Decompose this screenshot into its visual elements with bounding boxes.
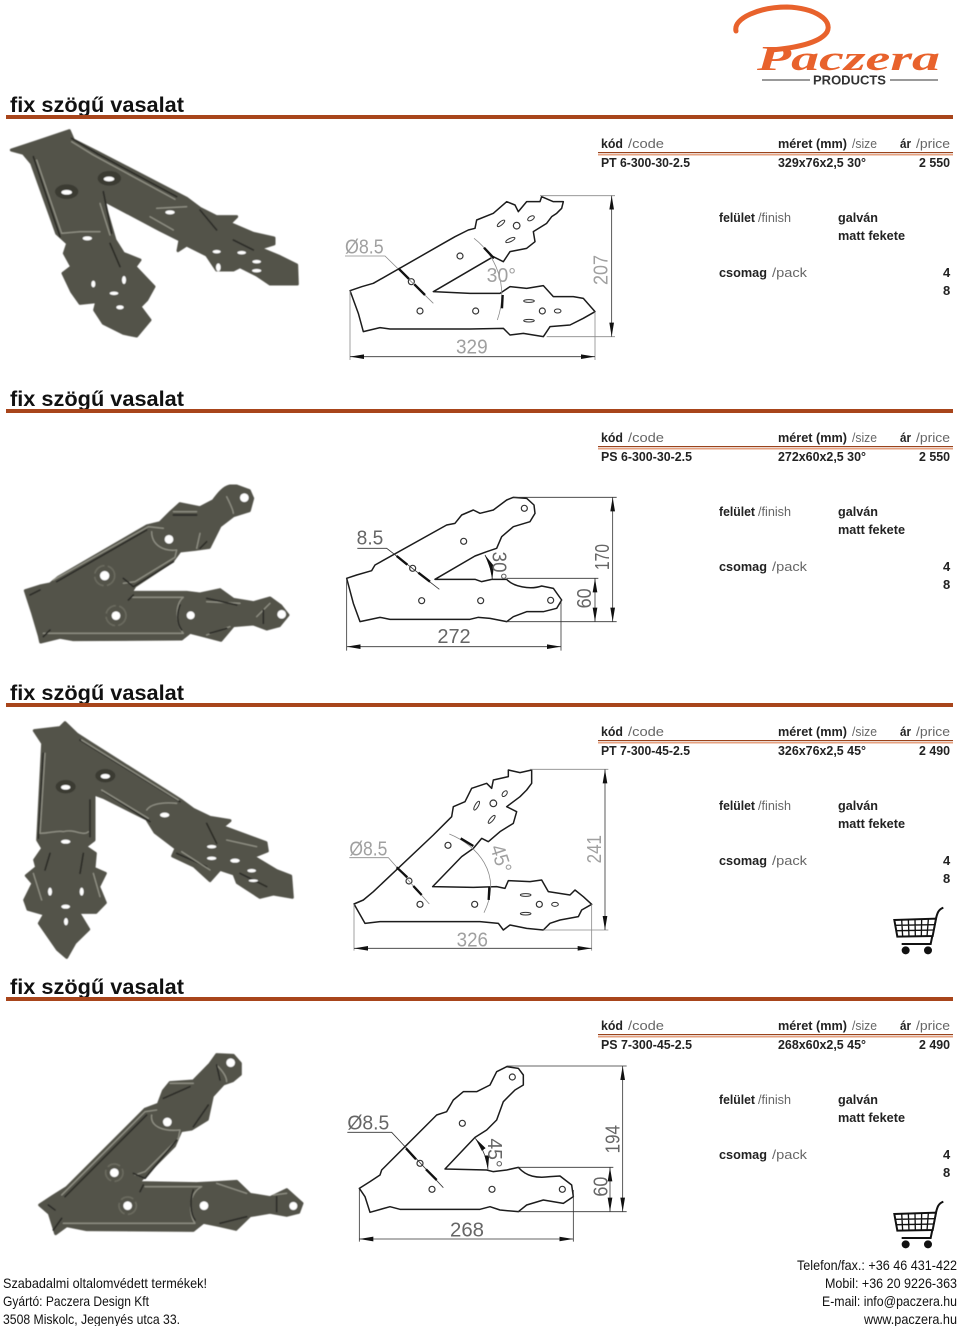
spec table row <box>601 155 950 170</box>
technical drawing: 272 <box>437 625 471 648</box>
finish and pack: felület <box>719 1092 756 1107</box>
spec table header: méret (mm) <box>778 1018 847 1033</box>
technical drawing: 45° <box>483 1138 506 1168</box>
finish and pack <box>719 210 951 298</box>
spec table header: kód <box>601 136 623 151</box>
spec table header: méret (mm) <box>778 724 847 739</box>
finish and pack: /finish <box>758 798 791 813</box>
spec table header <box>598 430 953 449</box>
finish and pack: felület <box>719 210 756 225</box>
spec table header <box>598 136 953 155</box>
product photo <box>25 486 288 642</box>
spec table row: 2 550 <box>919 155 950 170</box>
icon: shopping cart <box>894 908 943 954</box>
spec table header: /size <box>852 430 877 445</box>
spec table header: ár <box>900 136 911 151</box>
footer: left address: Gyártó: Paczera Design Kft <box>3 1293 149 1309</box>
spec table row <box>601 743 950 758</box>
spec table header: /price <box>916 430 950 445</box>
technical drawing <box>345 196 615 360</box>
panel: PT 7-300-45-2.5 <box>6 682 953 957</box>
spec table row: PS 7-300-45-2.5 <box>601 1037 692 1052</box>
spec table header <box>598 1018 953 1037</box>
finish and pack: csomag <box>719 265 767 280</box>
finish and pack: csomag <box>719 853 767 868</box>
finish and pack: 8 <box>943 577 950 592</box>
spec table header: ár <box>900 724 911 739</box>
heading: fix szögű vasalat <box>10 682 184 705</box>
spec table row: 329x76x2,5 30° <box>778 155 866 170</box>
spec table row: PT 6-300-30-2.5 <box>601 155 690 170</box>
heading: fix szögű vasalat <box>10 388 184 411</box>
product photo <box>40 1055 302 1234</box>
finish and pack: galván <box>838 1092 878 1107</box>
spec table header: /size <box>852 1018 877 1033</box>
technical drawing: 268 <box>450 1218 484 1241</box>
heading: fix szögű vasalat <box>10 976 184 999</box>
panel: PS 6-300-30-2.5 <box>6 388 953 651</box>
footer: left address <box>3 1275 207 1326</box>
spec table header: /code <box>628 1018 664 1033</box>
finish and pack: felület <box>719 504 756 519</box>
spec table header: /code <box>628 430 664 445</box>
finish and pack: /finish <box>758 1092 791 1107</box>
finish and pack: felület <box>719 798 756 813</box>
finish and pack: matt fekete <box>838 522 905 537</box>
footer: left address: Szabadalmi oltalomvédett termékek! <box>3 1275 207 1291</box>
spec table row: 2 550 <box>919 449 950 464</box>
finish and pack: /finish <box>758 504 791 519</box>
spec table header: /price <box>916 724 950 739</box>
spec table row: 2 490 <box>919 1037 950 1052</box>
finish and pack: 8 <box>943 283 950 298</box>
logo: Paczera Products <box>736 7 940 88</box>
spec table header: /price <box>916 1018 950 1033</box>
finish and pack <box>719 798 951 886</box>
spec table header: méret (mm) <box>778 136 847 151</box>
technical drawing: Ø8.5 <box>345 235 384 258</box>
spec table header: ár <box>900 430 911 445</box>
icon: shopping cart <box>894 1202 943 1248</box>
technical drawing: 60 <box>589 1177 612 1197</box>
technical drawing <box>347 1066 627 1242</box>
technical drawing: 326 <box>457 929 488 952</box>
finish and pack: 8 <box>943 871 950 886</box>
finish and pack: csomag <box>719 1147 767 1162</box>
finish and pack: matt fekete <box>838 228 905 243</box>
spec table row: 2 490 <box>919 743 950 758</box>
finish and pack: matt fekete <box>838 1110 905 1125</box>
logo: Paczera Products: PRODUCTS <box>813 74 886 88</box>
technical drawing: 170 <box>591 544 614 570</box>
technical drawing: Ø8.5 <box>347 1111 389 1134</box>
technical drawing: 45° <box>485 842 516 876</box>
finish and pack: galván <box>838 210 878 225</box>
product photo <box>11 131 297 336</box>
panel: PS 7-300-45-2.5 <box>6 976 953 1248</box>
spec table row: PT 7-300-45-2.5 <box>601 743 690 758</box>
technical drawing: 30° <box>487 264 516 287</box>
spec table header <box>598 724 953 743</box>
spec table header: kód <box>601 430 623 445</box>
spec table row: 272x60x2,5 30° <box>778 449 866 464</box>
finish and pack: 8 <box>943 1165 950 1180</box>
technical drawing: 194 <box>601 1125 624 1153</box>
spec table header: kód <box>601 724 623 739</box>
spec table header: /price <box>916 136 950 151</box>
product photo <box>25 723 292 957</box>
finish and pack <box>719 1092 951 1180</box>
finish and pack <box>719 504 951 592</box>
technical drawing <box>347 497 617 651</box>
technical drawing: 8.5 <box>357 526 383 549</box>
finish and pack: /finish <box>758 210 791 225</box>
spec table row: 326x76x2,5 45° <box>778 743 866 758</box>
technical drawing: 60 <box>573 588 596 608</box>
spec table header: méret (mm) <box>778 430 847 445</box>
footer: right contacts <box>797 1257 957 1326</box>
technical drawing: 30° <box>488 552 511 580</box>
finish and pack: /pack <box>772 1147 808 1162</box>
finish and pack: 4 <box>943 1147 951 1162</box>
finish and pack: csomag <box>719 559 767 574</box>
finish and pack: /pack <box>772 559 808 574</box>
technical drawing: 207 <box>590 255 613 285</box>
finish and pack: galván <box>838 798 878 813</box>
finish and pack: 4 <box>943 265 951 280</box>
spec table header: /size <box>852 724 877 739</box>
technical drawing: Ø8.5 <box>349 838 387 861</box>
technical drawing: 329 <box>456 335 488 358</box>
finish and pack: /pack <box>772 265 808 280</box>
spec table header: ár <box>900 1018 911 1033</box>
spec table row <box>601 1037 950 1052</box>
finish and pack: 4 <box>943 559 951 574</box>
finish and pack: galván <box>838 504 878 519</box>
spec table row: 268x60x2,5 45° <box>778 1037 866 1052</box>
panel: PT 6-300-30-2.5 <box>6 94 953 360</box>
finish and pack: 4 <box>943 853 951 868</box>
spec table header: /size <box>852 136 877 151</box>
logo: Paczera Products: Paczera <box>755 39 940 78</box>
technical drawing: 241 <box>583 835 606 863</box>
heading: fix szögű vasalat <box>10 94 184 117</box>
spec table header: /code <box>628 136 664 151</box>
spec table header: kód <box>601 1018 623 1033</box>
spec table header: /code <box>628 724 664 739</box>
finish and pack: matt fekete <box>838 816 905 831</box>
spec table row <box>601 449 950 464</box>
spec table row: PS 6-300-30-2.5 <box>601 449 692 464</box>
finish and pack: /pack <box>772 853 808 868</box>
technical drawing <box>349 769 608 952</box>
